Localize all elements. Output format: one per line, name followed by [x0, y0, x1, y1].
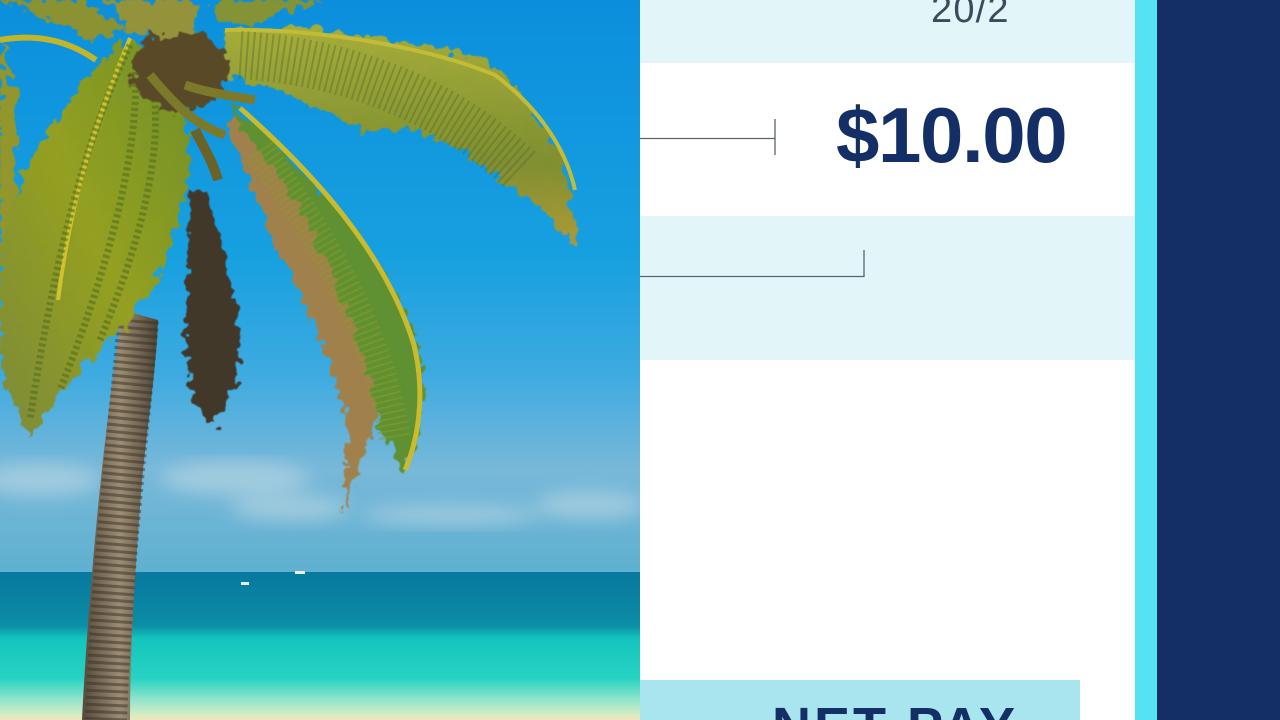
lower-right frond [225, 102, 422, 512]
photo: palm tree on a tropical beach [0, 0, 640, 720]
top-right frond [222, 28, 578, 250]
frond rib: far left [0, 38, 96, 60]
leader line to field [640, 250, 865, 278]
sky [0, 0, 640, 572]
navy side panel [1157, 0, 1280, 720]
palm crown [0, 0, 320, 180]
palm trunk [82, 310, 158, 720]
row: amount [640, 63, 1135, 216]
panel: white receipt card [640, 0, 1135, 720]
row band: date [640, 0, 1135, 63]
sea and sand [0, 572, 640, 720]
dark hanging frond [186, 190, 238, 428]
amount value: $10.00 [836, 91, 1066, 179]
row band: empty field [640, 216, 1135, 360]
net pay box [640, 680, 1080, 720]
leader line to amount [640, 119, 776, 155]
cyan strip [1135, 0, 1157, 720]
top-left frond [0, 45, 18, 320]
large left frond [0, 38, 190, 442]
clouds [0, 461, 645, 525]
boats [241, 571, 305, 585]
